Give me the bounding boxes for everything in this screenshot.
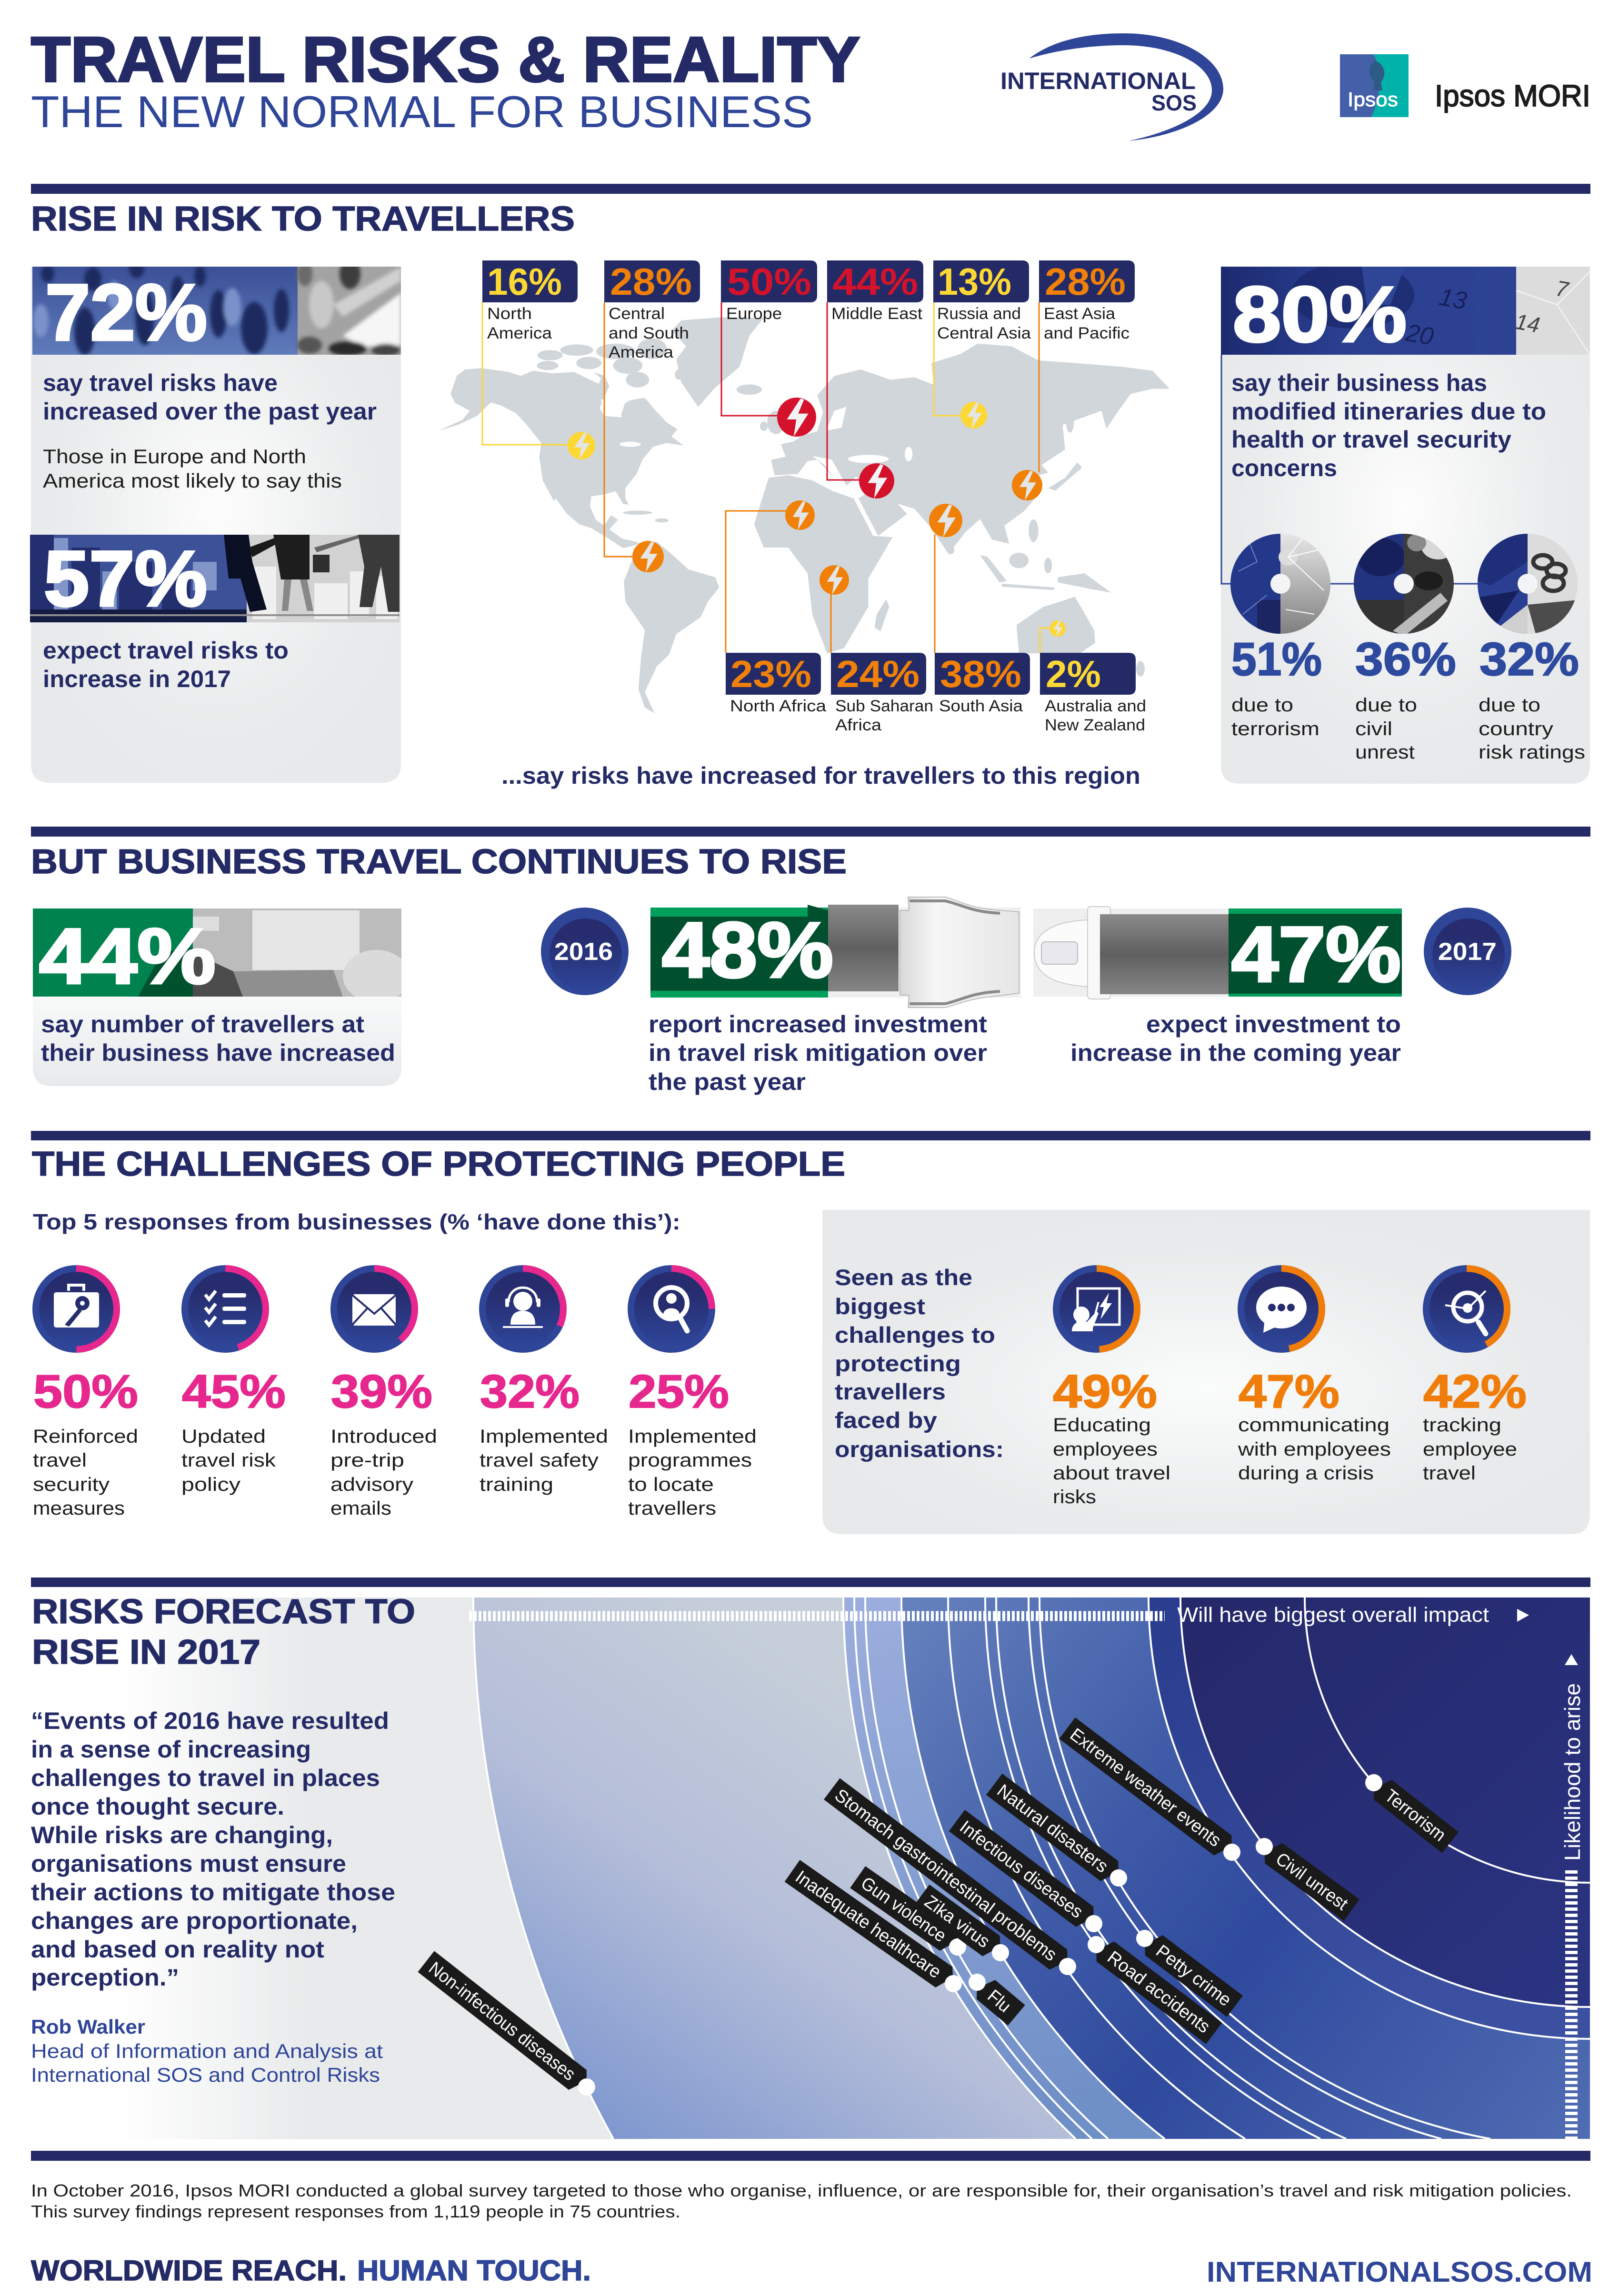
response: 32% safety training: 32% bbox=[480, 1365, 580, 1418]
callout: Central and South America: Central bbox=[609, 305, 665, 323]
text: expect travel risks: expect travel risks to bbox=[43, 637, 289, 664]
disc holes bbox=[1270, 574, 1538, 594]
seatbelt: right bbox=[1033, 907, 1402, 999]
panel: 72% and 57% bbox=[30, 259, 401, 783]
footer strapline bbox=[31, 2255, 591, 2286]
badge: 2016: 2016 bbox=[554, 938, 613, 966]
callout: Australia and New Zealand bbox=[1040, 653, 1146, 734]
text: say their business: modified itineraries due to bbox=[1231, 398, 1546, 425]
stat: 32% due to country risk ratings: due to bbox=[1479, 695, 1540, 716]
response: 25% locate travellers bbox=[628, 1265, 757, 1519]
label: Flu bbox=[962, 1967, 1025, 2026]
response: 45% updated policy: travel risk bbox=[181, 1450, 276, 1471]
stat: 32% due to country risk ratings: country bbox=[1479, 719, 1553, 739]
logo: International SOS: INTERNATIONAL bbox=[1000, 68, 1196, 94]
response: 45% updated policy bbox=[181, 1265, 286, 1495]
label: Road accidents: Road accidents bbox=[1104, 1947, 1214, 2037]
callout: Russia and Central Asia: Central Asia bbox=[937, 324, 1031, 342]
text: those in Europe bbox=[43, 445, 342, 492]
callout: Sub Saharan Africa bbox=[831, 653, 933, 734]
stat: 32% due to country risk ratings: risk ratings bbox=[1479, 742, 1585, 763]
chart: risk bands bbox=[473, 1597, 1590, 2139]
marker: North America bbox=[568, 432, 595, 459]
callout: Europe bbox=[721, 260, 817, 323]
label: Civil unrest: Civil unrest bbox=[1272, 1849, 1352, 1915]
callout: East Asia and Pacific: 28% bbox=[1045, 260, 1126, 303]
label: Gun violence: Gun violence bbox=[857, 1873, 950, 1947]
stat: 51% due to terrorism bbox=[1231, 633, 1322, 739]
response: 39% pre-trip emails bbox=[330, 1265, 437, 1519]
response: 32% safety training: training bbox=[480, 1474, 553, 1495]
challenge: 47% communicating: during a crisis bbox=[1238, 1463, 1374, 1484]
callout: Europe: 50% bbox=[727, 260, 811, 303]
stat: 51% due to terrorism: terrorism bbox=[1231, 719, 1319, 739]
stat: 72%: 72% bbox=[45, 268, 207, 357]
response: 50% reinforced security: travel bbox=[33, 1450, 87, 1471]
heading: risks forecast to rise: RISKS FORECAST TO bbox=[32, 1593, 415, 1631]
text: say their business bbox=[1231, 369, 1546, 481]
stat: 44%: 44% bbox=[39, 912, 216, 1000]
icon: briefcase and key bbox=[32, 1265, 120, 1353]
heading: risks forecast to rise bbox=[32, 1593, 415, 1671]
response: 50% reinforced security: measures bbox=[33, 1498, 125, 1519]
text: expect travel risks bbox=[43, 637, 289, 692]
subtitle: THE NEW NORMAL FOR BUSINESS bbox=[31, 87, 813, 137]
section bar 2 bbox=[31, 827, 1590, 837]
label: Civil unrest bbox=[1249, 1831, 1359, 1921]
callout: South Asia bbox=[935, 653, 1030, 715]
axis: overall impact bbox=[469, 1603, 1529, 1627]
challenge: 49% educating employees: Educating bbox=[1053, 1415, 1151, 1436]
text: say travel risks bbox=[43, 369, 377, 425]
stat: 57%: 57% bbox=[44, 535, 207, 622]
stat: 51% due to terrorism: due to bbox=[1231, 695, 1293, 716]
text: seen as the biggest challenges bbox=[835, 1265, 1004, 1462]
subheading: top 5 responses: Top 5 responses from businesses (% ‘have done this’): bbox=[33, 1209, 680, 1234]
photo disc: civil unrest bbox=[1354, 531, 1455, 636]
response: 25% locate travellers: Implemented bbox=[628, 1426, 757, 1447]
callout: Central and South America bbox=[604, 260, 700, 361]
section bar 3 bbox=[31, 1131, 1590, 1140]
challenge: 47% communicating bbox=[1238, 1265, 1391, 1484]
label: Zika virus: Zika virus bbox=[921, 1892, 993, 1952]
attribution: Rob Walker bbox=[31, 2016, 145, 2038]
text: expect investment: increase in the coming year bbox=[1070, 1039, 1401, 1066]
label: Gun violence bbox=[850, 1866, 972, 1963]
callout: Middle East: Middle East bbox=[831, 305, 923, 323]
logo: International SOS: SOS bbox=[1151, 90, 1197, 115]
quote: perception.” bbox=[31, 1964, 179, 1991]
challenge: 42% tracking bbox=[1423, 1265, 1527, 1484]
icon: checklist bbox=[181, 1265, 269, 1353]
label: Flu: Flu bbox=[983, 1986, 1015, 2016]
text: say their business: health or travel security bbox=[1231, 426, 1511, 453]
logo: International SOS bbox=[1000, 33, 1223, 141]
panel: 80% modified itineraries bbox=[1221, 262, 1590, 784]
axis: overall impact: Will have biggest overall impact bbox=[1177, 1603, 1489, 1627]
label: Petty crime bbox=[1130, 1923, 1243, 2017]
icon: speech bubble bbox=[1238, 1265, 1325, 1353]
challenge: 47% communicating: with employees bbox=[1238, 1439, 1391, 1460]
quote: challenges to travel in places bbox=[31, 1765, 380, 1791]
quote: organisations must ensure bbox=[31, 1850, 346, 1877]
response: 32% safety training: Implemented bbox=[480, 1426, 608, 1447]
axis: likelihood to arise: Likelihood to arise bbox=[1560, 1683, 1585, 1861]
callout: Australia and New Zealand: New Zealand bbox=[1045, 716, 1145, 734]
text: expect investment: expect investment to bbox=[1146, 1011, 1401, 1038]
text: say travel risks: increased over the past year bbox=[43, 398, 377, 425]
label: Natural disasters bbox=[986, 1774, 1133, 1894]
text: say travel risks: say travel risks have bbox=[43, 369, 278, 396]
callout: Central and South America: and South bbox=[609, 324, 689, 342]
quote: “Events of 2016 have resulted bbox=[31, 1707, 389, 1734]
challenge: 42% tracking: tracking bbox=[1423, 1415, 1501, 1436]
challenge: 42% tracking: employee bbox=[1423, 1439, 1517, 1460]
photo: tightrope walkers bbox=[30, 535, 400, 622]
logo: Ipsos MORI: Ipsos bbox=[1348, 88, 1398, 110]
stat: 36% due to civil unrest bbox=[1355, 633, 1456, 763]
seatbelt: left bbox=[650, 897, 1021, 1008]
marker: Australia and New Zealand bbox=[1049, 620, 1066, 637]
marker: South Asia bbox=[929, 504, 962, 537]
callout: Sub Saharan Africa: Sub Saharan bbox=[835, 697, 933, 715]
stat: 36% due to civil unrest: unrest bbox=[1355, 742, 1415, 763]
challenge: 49% educating employees: 49% bbox=[1053, 1365, 1157, 1418]
section bar 1 bbox=[31, 184, 1590, 194]
response: 39% pre-trip emails: 39% bbox=[331, 1365, 432, 1418]
callout: East Asia and Pacific bbox=[1039, 260, 1135, 342]
photo: calendar bbox=[1221, 262, 1590, 355]
attribution bbox=[31, 2016, 383, 2086]
response: 50% reinforced security: Reinforced bbox=[33, 1426, 138, 1447]
text: say number of travellers: say number of travellers at bbox=[41, 1011, 364, 1038]
callout: North America: North bbox=[487, 305, 532, 323]
footer strapline: HUMAN TOUCH. bbox=[357, 2255, 591, 2286]
label: Stomach gastrointestinal problems: Stomach gastrointestinal problems bbox=[831, 1785, 1060, 1965]
section bar 5 bbox=[31, 2151, 1590, 2161]
text: say number of travellers: their business have increased bbox=[41, 1039, 395, 1066]
icon: presenter at board bbox=[1053, 1265, 1140, 1353]
map lead lines bbox=[482, 302, 1050, 653]
footer url: INTERNATIONALSOS.COM bbox=[1207, 2256, 1592, 2288]
text: seen as the biggest challenges: travellers bbox=[835, 1379, 946, 1404]
callout: North Africa bbox=[726, 653, 826, 715]
heading: challenges of protecting people: THE CHALLENGES OF PROTECTING PEOPLE bbox=[32, 1145, 845, 1183]
survey note: This survey findings represent responses from 1,119 people in 75 countries. bbox=[31, 2202, 680, 2221]
quote: in a sense of increasing bbox=[31, 1736, 311, 1763]
photo disc: terrorism bbox=[1230, 534, 1330, 634]
survey note bbox=[31, 2181, 1572, 2221]
heading: rise in risk to travellers: RISE IN RISK TO TRAVELLERS bbox=[31, 200, 575, 238]
challenge: 42% tracking: travel bbox=[1423, 1463, 1476, 1484]
attribution: Head of Information and Analysis at bbox=[31, 2040, 383, 2062]
callout: Australia and New Zealand: 2% bbox=[1046, 653, 1101, 695]
marker: Sub Saharan Africa bbox=[819, 565, 849, 595]
survey note: In October 2016, Ipsos MORI conducted a global survey targeted to those who organise, influence, or are responsible for, their organisation’s travel and risk mitigation policies. bbox=[31, 2181, 1572, 2200]
label: Extreme weather events: Extreme weather events bbox=[1066, 1725, 1225, 1851]
callout: East Asia and Pacific: East Asia bbox=[1044, 305, 1115, 323]
callout: Russia and Central Asia bbox=[933, 260, 1031, 342]
icon: headset person bbox=[479, 1265, 567, 1353]
axis: likelihood to arise bbox=[1560, 1654, 1585, 2139]
response: 45% updated policy: 45% bbox=[182, 1365, 286, 1418]
marker: Russia and Central Asia bbox=[960, 402, 987, 429]
label: Infectious diseases: Infectious diseases bbox=[956, 1817, 1087, 1922]
text: seen as the biggest challenges: faced by bbox=[835, 1408, 937, 1433]
callout: Middle East bbox=[827, 260, 923, 323]
response: 25% locate travellers: programmes bbox=[628, 1450, 752, 1471]
response: 50% reinforced security: 50% bbox=[33, 1365, 138, 1418]
stat: 32% due to country risk ratings bbox=[1479, 633, 1585, 763]
quote: changes are proportionate, bbox=[31, 1907, 358, 1934]
text: expect investment bbox=[1070, 1011, 1401, 1066]
connector line bbox=[1221, 355, 1481, 584]
panel: biggest challenges bbox=[822, 1210, 1590, 1534]
challenge: 49% educating employees: risks bbox=[1053, 1487, 1096, 1507]
photo disc: country risk ratings bbox=[1478, 534, 1578, 634]
response: 39% pre-trip emails: pre-trip bbox=[330, 1450, 404, 1471]
response: 50% reinforced security: security bbox=[33, 1474, 110, 1495]
marker: Central and South America bbox=[632, 541, 664, 572]
attribution: International SOS and Control Risks bbox=[31, 2064, 380, 2086]
challenge: 42% tracking: 42% bbox=[1423, 1365, 1527, 1418]
callout: Central and South America: 28% bbox=[610, 260, 692, 303]
callout: East Asia and Pacific: and Pacific bbox=[1044, 324, 1129, 342]
footer strapline: WORLDWIDE REACH. bbox=[31, 2255, 347, 2286]
stat: 36% due to civil unrest: civil bbox=[1355, 719, 1392, 739]
world map bbox=[438, 317, 1169, 713]
callout: Australia and New Zealand: Australia and bbox=[1045, 697, 1146, 715]
callout: North America bbox=[482, 260, 578, 342]
label: Terrorism bbox=[1359, 1767, 1459, 1853]
stat: 36% due to civil unrest: 36% bbox=[1355, 633, 1456, 685]
challenge: 47% communicating: 47% bbox=[1239, 1365, 1339, 1418]
challenge: 49% educating employees bbox=[1053, 1265, 1170, 1507]
callout: Sub Saharan Africa: Africa bbox=[835, 716, 881, 734]
callout: North America: America bbox=[487, 324, 552, 342]
marker: North Africa bbox=[785, 500, 815, 530]
response: 39% pre-trip emails: Introduced bbox=[330, 1426, 437, 1447]
callout: South Asia: South Asia bbox=[939, 697, 1023, 715]
text: seen as the biggest challenges: Seen as the bbox=[835, 1265, 972, 1290]
panel: 44% bbox=[33, 908, 410, 1086]
badge: 2017: 2017 bbox=[1438, 938, 1497, 966]
text: report increased investment: report increased investment bbox=[649, 1011, 987, 1038]
callout: Russia and Central Asia: 13% bbox=[938, 260, 1011, 303]
text: say number of travellers bbox=[41, 1011, 395, 1066]
response: 50% reinforced security bbox=[32, 1265, 138, 1519]
section bar 4 bbox=[31, 1577, 1590, 1587]
marker: Middle East bbox=[859, 463, 894, 499]
text: seen as the biggest challenges: organisations: bbox=[835, 1437, 1004, 1462]
text: report increased investment: in travel risk mitigation over bbox=[649, 1039, 987, 1066]
quote: and based on reality not bbox=[31, 1936, 324, 1963]
stat: 48%: 48% bbox=[662, 906, 833, 994]
icon: magnifier target bbox=[1423, 1265, 1510, 1353]
text: those in Europe: Those in Europe and North bbox=[43, 445, 306, 468]
callout: North Africa: 23% bbox=[730, 653, 811, 695]
text: seen as the biggest challenges: challenges to bbox=[835, 1322, 995, 1348]
quote: once thought secure. bbox=[31, 1793, 284, 1820]
quote: their actions to mitigate those bbox=[31, 1879, 395, 1906]
response: 25% locate travellers: to locate bbox=[628, 1474, 714, 1495]
photo: calendar: 14 bbox=[1513, 309, 1542, 338]
callout: South Asia: 38% bbox=[940, 653, 1021, 695]
badge: 2016 bbox=[541, 908, 629, 995]
quote bbox=[31, 1707, 395, 1991]
label: Non-infectious diseases: Non-infectious diseases bbox=[425, 1958, 579, 2085]
text: report increased investment: the past year bbox=[649, 1068, 806, 1095]
text: those in Europe: America most likely to say this bbox=[43, 469, 342, 492]
photo: calendar: 7 bbox=[1554, 276, 1571, 302]
response: 32% safety training bbox=[479, 1265, 608, 1495]
quote: While risks are changing, bbox=[31, 1822, 333, 1848]
text: seen as the biggest challenges: protecting bbox=[835, 1351, 961, 1376]
badge: 2017 bbox=[1424, 908, 1511, 995]
text: say their business: say their business has bbox=[1231, 369, 1487, 396]
stat: 36% due to civil unrest: due to bbox=[1355, 695, 1417, 716]
stat: 80%: 80% bbox=[1233, 270, 1407, 358]
stat: 47%: 47% bbox=[1231, 910, 1401, 998]
stat: 32% due to country risk ratings: 32% bbox=[1479, 633, 1579, 685]
caption: say risks have increased: ...say risks have increased for travellers to this region bbox=[501, 762, 1140, 789]
label: Terrorism: Terrorism bbox=[1381, 1786, 1449, 1846]
response: 39% pre-trip emails: advisory bbox=[330, 1474, 413, 1495]
callout: Europe: Europe bbox=[726, 305, 782, 323]
callout: North America: 16% bbox=[487, 260, 562, 303]
photo: calendar: 20 bbox=[1403, 319, 1436, 351]
response: 25% locate travellers: travellers bbox=[628, 1498, 716, 1519]
text: expect travel risks: increase in 2017 bbox=[43, 666, 231, 692]
icon: envelope bbox=[330, 1265, 418, 1353]
heading: risks forecast to rise: RISE IN 2017 bbox=[32, 1633, 260, 1671]
label: Natural disasters: Natural disasters bbox=[993, 1781, 1112, 1877]
marker: Europe bbox=[777, 398, 816, 437]
challenge: 47% communicating: communicating bbox=[1238, 1415, 1389, 1436]
icon: magnifier person bbox=[628, 1265, 715, 1353]
text: report increased investment bbox=[649, 1011, 987, 1095]
label: Zika virus bbox=[914, 1885, 1015, 1968]
photo: calendar: 13 bbox=[1437, 283, 1469, 315]
photo: crowd bbox=[32, 259, 401, 356]
response: 32% safety training: travel safety bbox=[480, 1450, 599, 1471]
label: Inadequate healthcare: Inadequate healthcare bbox=[792, 1867, 945, 1982]
challenge: 49% educating employees: employees bbox=[1053, 1439, 1158, 1460]
response: 25% locate travellers: 25% bbox=[629, 1365, 729, 1418]
header bbox=[31, 24, 1590, 141]
label: Petty crime: Petty crime bbox=[1152, 1941, 1235, 2010]
photo: traveller with laptop bbox=[33, 908, 410, 1002]
callout: North Africa: North Africa bbox=[730, 697, 826, 715]
callout: Central and South America: America bbox=[609, 343, 673, 361]
heading: but business travel continues to rise: BUT BUSINESS TRAVEL CONTINUES TO RISE bbox=[31, 843, 847, 881]
response: 45% updated policy: Updated bbox=[181, 1426, 266, 1447]
callout: Russia and Central Asia: Russia and bbox=[937, 305, 1021, 323]
response: 45% updated policy: policy bbox=[181, 1474, 240, 1495]
logo: Ipsos MORI: Ipsos MORI bbox=[1435, 79, 1590, 113]
stat: 51% due to terrorism: 51% bbox=[1231, 633, 1322, 685]
callout: Middle East: 44% bbox=[832, 260, 918, 303]
logo: Ipsos MORI bbox=[1340, 54, 1590, 117]
challenge: 49% educating employees: about travel bbox=[1053, 1463, 1170, 1484]
panel: forecast background bbox=[32, 1597, 651, 2139]
label: Road accidents bbox=[1081, 1929, 1222, 2044]
response: 39% pre-trip emails: emails bbox=[330, 1498, 391, 1519]
callout: Sub Saharan Africa: 24% bbox=[836, 653, 919, 695]
title: TRAVEL RISKS & REALITY bbox=[31, 24, 860, 95]
text: seen as the biggest challenges: biggest bbox=[835, 1294, 925, 1319]
text: say their business: concerns bbox=[1231, 455, 1337, 481]
marker: East Asia and Pacific bbox=[1012, 470, 1042, 500]
